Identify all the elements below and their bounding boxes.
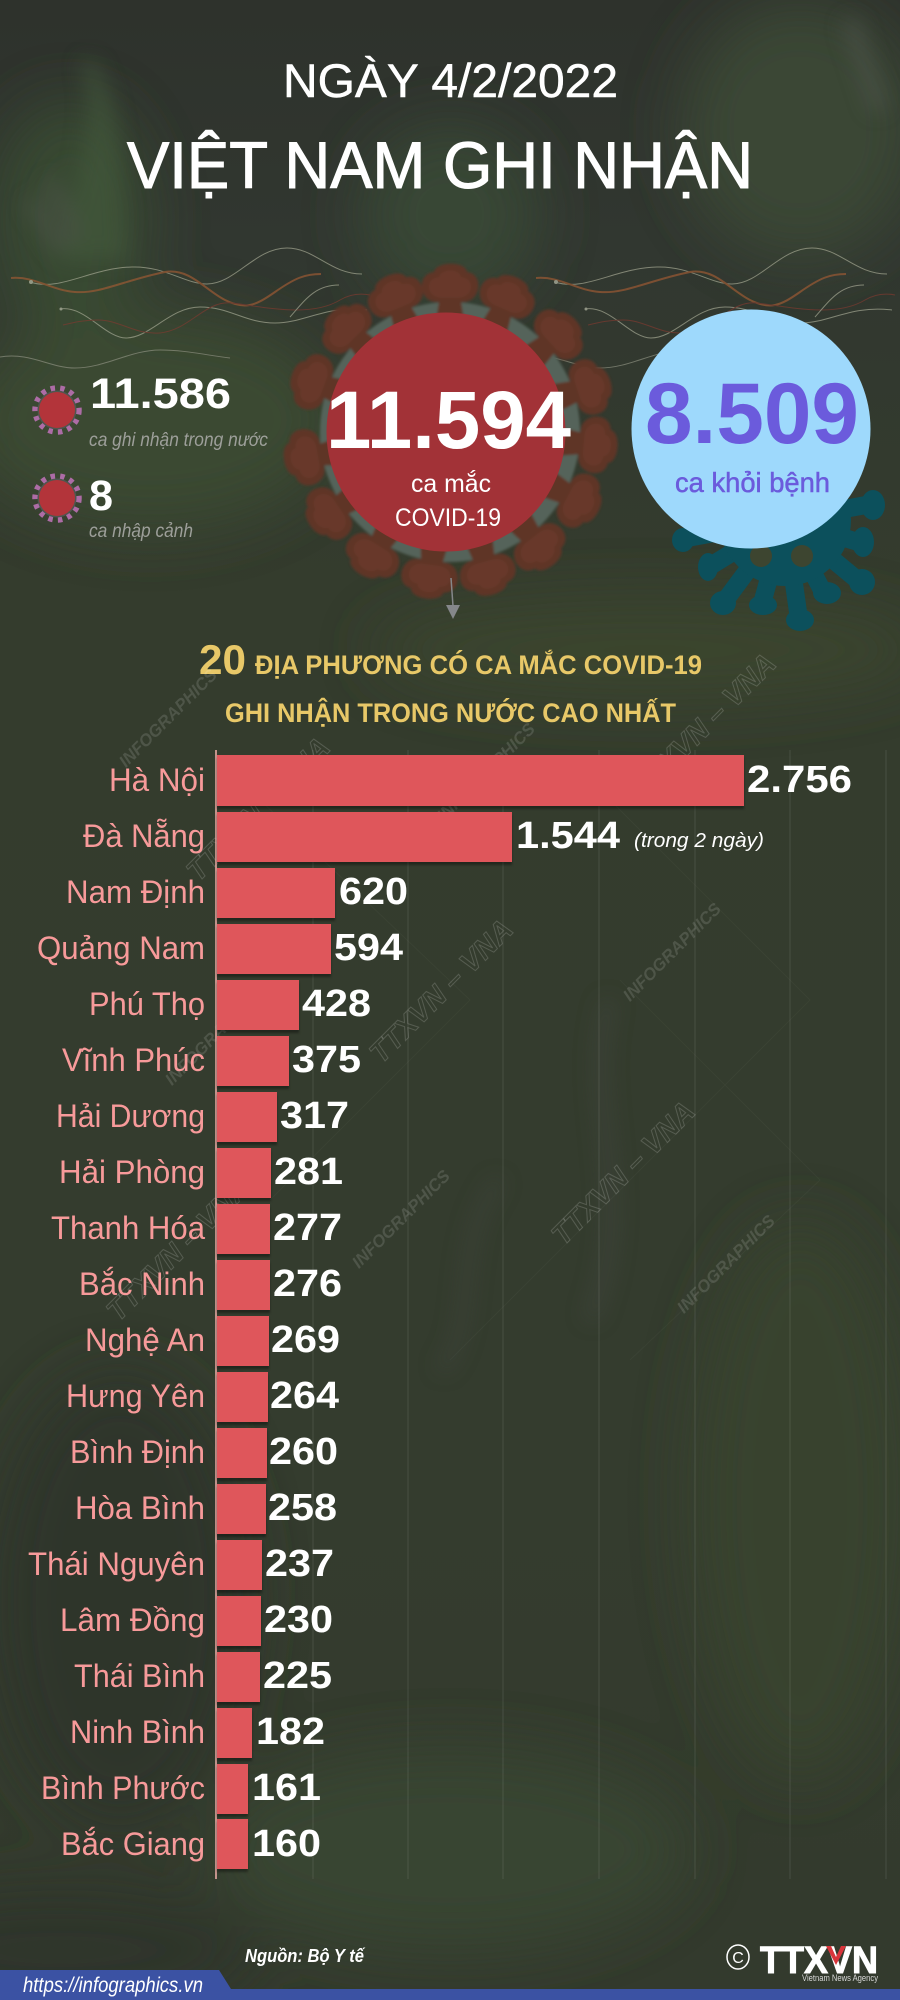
row: Vĩnh Phúc: Vĩnh Phúc (62, 1042, 205, 1078)
row: Nghệ An: 269 (271, 1319, 340, 1361)
watermarks: INFOGRAPHICS (115, 665, 221, 771)
row: Thái Bình (74, 1652, 332, 1702)
row: Bình Định (70, 1428, 338, 1478)
logo: TTXVN: TTXVN (760, 1940, 878, 1982)
recovered number: 8.509 (645, 366, 859, 462)
row: Bình Định: Bình Định (70, 1434, 205, 1470)
row: Hòa Bình: 258 (268, 1487, 337, 1529)
row: Vĩnh Phúc (62, 1036, 361, 1086)
arrow (446, 578, 460, 619)
logo: TTXVN: Vietnam News Agency (802, 1973, 878, 1983)
row: Hòa Bình: Hòa Bình (75, 1490, 205, 1526)
row: Ninh Bình (70, 1708, 325, 1758)
icon: brown coronavirus (279, 264, 620, 603)
row: Bắc Giang: 160 (252, 1823, 321, 1865)
row: Hưng Yên: 264 (270, 1375, 339, 1417)
row: Hà Nội: Hà Nội (109, 762, 205, 798)
row: Phú Thọ: Phú Thọ (89, 986, 205, 1022)
row: Bắc Giang: Bắc Giang (61, 1826, 205, 1862)
row: Ninh Bình: 182 (256, 1711, 325, 1753)
row: Hà Nội: 2.756 (747, 759, 852, 801)
row: Nghệ An: Nghệ An (85, 1322, 205, 1358)
watermarks: INFOGRAPHICS (348, 1166, 454, 1272)
row: Thái Nguyên (28, 1540, 334, 1590)
row: Quảng Nam (37, 924, 403, 974)
heading line 2: GHI NHẬN TRONG NƯỚC CAO NHẤT (225, 697, 676, 728)
row: Đà Nẵng (83, 812, 764, 862)
logo: TTXVN: C (732, 1950, 744, 1967)
watermarks: TTXVN – VNA (627, 648, 783, 804)
row: Bình Phước: 161 (252, 1767, 321, 1809)
imported number: 8 (89, 472, 113, 520)
row: Thái Bình: Thái Bình (74, 1658, 205, 1694)
heading (199, 636, 702, 728)
row: Hải Dương: Hải Dương (56, 1098, 205, 1134)
row: Bắc Ninh: 276 (273, 1263, 342, 1305)
row: Thái Nguyên: Thái Nguyên (28, 1546, 205, 1582)
row: Thái Bình: 225 (263, 1655, 332, 1697)
row: Phú Thọ (89, 980, 371, 1030)
row: Bình Định: 260 (269, 1431, 338, 1473)
row: Bình Phước (41, 1764, 321, 1814)
row: Thanh Hóa: 277 (273, 1207, 342, 1249)
domestic caption: ca ghi nhận trong nước (89, 430, 268, 451)
decorative waves right (525, 248, 895, 368)
row: Quảng Nam: 594 (334, 927, 403, 969)
heading line 1: ĐỊA PHƯƠNG CÓ CA MẮC COVID-19 (255, 649, 702, 680)
row: Nam Định: Nam Định (66, 874, 205, 910)
row: Bắc Ninh (79, 1260, 342, 1310)
row: Lâm Đồng: 230 (264, 1599, 333, 1641)
row: Nam Định: 620 (339, 871, 408, 913)
watermarks: TTXVN – VNA (364, 914, 520, 1070)
watermarks: TTXVN – VNA (546, 1096, 702, 1252)
row: Lâm Đồng (60, 1596, 333, 1646)
row: Thanh Hóa (51, 1204, 342, 1254)
panel: recovered circle (632, 310, 870, 548)
row: Hòa Bình (75, 1484, 337, 1534)
icon: small virus (35, 388, 79, 432)
imported caption: ca nhập cảnh (89, 521, 193, 542)
row: Nghệ An (85, 1316, 340, 1366)
row: Hà Nội (109, 755, 852, 806)
caption: covid: COVID-19 (395, 504, 501, 532)
stat: domestic cases (35, 370, 268, 451)
panel: total cases circle (326, 312, 571, 552)
row: Hải Phòng: Hải Phòng (59, 1154, 205, 1190)
row: Đà Nẵng: 1.544 (516, 815, 620, 857)
decorative waves left (0, 248, 370, 368)
watermarks: INFOGRAPHICS (433, 719, 539, 825)
row: Thái Nguyên: 237 (265, 1543, 334, 1585)
row: Hưng Yên (66, 1372, 339, 1422)
watermarks: INFOGRAPHICS (161, 983, 267, 1089)
row: Hải Phòng (59, 1148, 343, 1198)
source: Nguồn: Bộ Y tế (245, 1946, 366, 1966)
row: Bắc Ninh: Bắc Ninh (79, 1266, 205, 1302)
watermarks: TTXVN – VNA (181, 732, 337, 888)
watermarks: INFOGRAPHICS (673, 1211, 779, 1317)
heading number: 20 (199, 636, 246, 683)
bar chart: top 20 localities (28, 750, 886, 1879)
watermarks: INFOGRAPHICS (619, 899, 725, 1005)
recovered caption: ca khỏi bệnh (675, 467, 830, 498)
total number: 11.594 (326, 375, 571, 466)
row: Đà Nẵng: (trong 2 ngày) (634, 830, 764, 852)
row: Nam Định (66, 868, 408, 918)
title: date: NGÀY 4/2/2022 (283, 54, 618, 107)
caption: ca mac: ca mắc (411, 469, 491, 498)
row: Lâm Đồng: Lâm Đồng (60, 1602, 205, 1638)
icon: small virus (35, 476, 79, 520)
row: Ninh Bình: Ninh Bình (70, 1714, 205, 1750)
row: Hải Phòng: 281 (274, 1151, 343, 1193)
watermarks (101, 648, 783, 1328)
row: Hải Dương (56, 1092, 349, 1142)
title: main: VIỆT NAM GHI NHẬN (127, 128, 753, 202)
row: Hải Dương: 317 (280, 1095, 349, 1137)
row: Đà Nẵng: Đà Nẵng (83, 818, 205, 854)
stat: imported cases (35, 472, 193, 542)
row: Bắc Giang (61, 1819, 321, 1869)
row: Quảng Nam: Quảng Nam (37, 930, 205, 966)
row: Bình Phước: Bình Phước (41, 1770, 205, 1806)
icon: teal recovery virus (672, 454, 885, 631)
row: Vĩnh Phúc: 375 (292, 1039, 361, 1081)
domestic number: 11.586 (90, 370, 231, 418)
row: Hưng Yên: Hưng Yên (66, 1378, 205, 1414)
watermarks: TTXVN – VNA (101, 1172, 257, 1328)
footer url: https://infographics.vn (23, 1974, 203, 1997)
row: Thanh Hóa: Thanh Hóa (51, 1210, 205, 1246)
row: Phú Thọ: 428 (302, 983, 371, 1025)
footer band (0, 1970, 900, 2000)
